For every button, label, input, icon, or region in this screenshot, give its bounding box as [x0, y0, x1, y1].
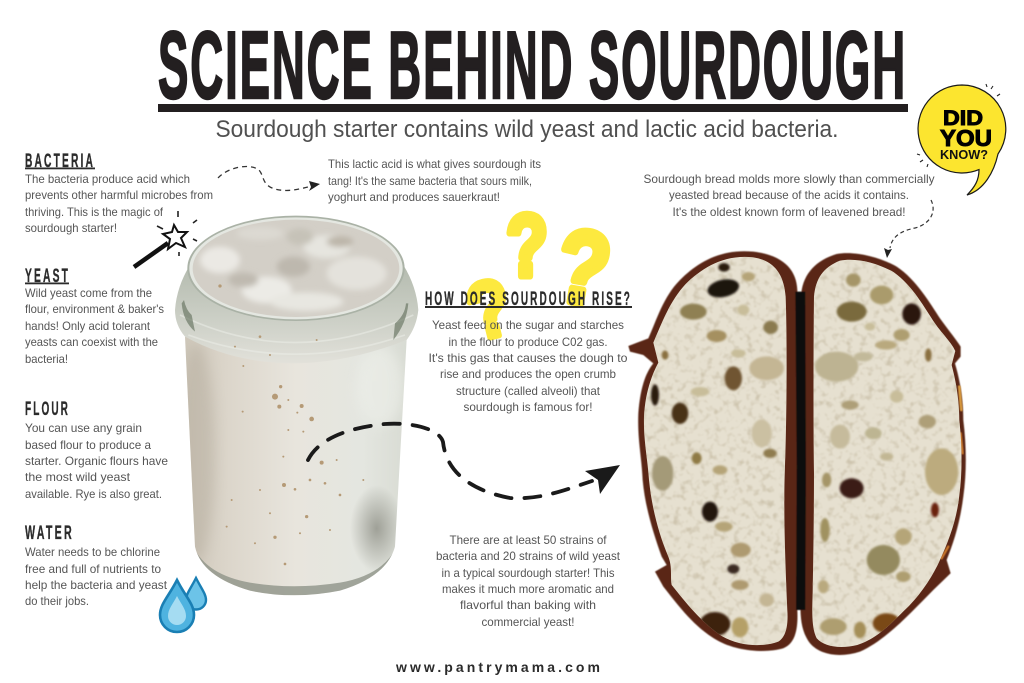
glass highlights	[182, 300, 408, 340]
text: strains: in a typical sourdough starter! This	[442, 566, 614, 580]
text: strains: commercial yeast!	[482, 615, 574, 629]
surface bubbles	[200, 227, 387, 311]
panel: water: WATER	[25, 523, 74, 544]
jar body	[185, 337, 407, 595]
sourdough bread cross-section	[628, 251, 967, 655]
starter surface	[193, 220, 399, 317]
panel: yeast: hands! Only acid tolerant	[25, 319, 151, 333]
panel: yeast: flour, environment & baker's	[25, 302, 164, 316]
text: lactic acid	[328, 157, 541, 204]
panel: bacteria	[25, 151, 213, 235]
panel: flour: the most wild yeast	[25, 470, 131, 484]
text: how sourdough rises: rise and produces the open crumb	[440, 367, 616, 381]
subtitle: Sourdough starter contains wild yeast and lactic acid bacteria.	[216, 116, 838, 143]
footer url: www.pantrymama.com	[395, 659, 600, 675]
panel: water: Water needs to be chlorine	[25, 545, 160, 559]
text: did you know fact	[644, 172, 934, 219]
text: strains: flavorful than baking with	[460, 598, 596, 612]
panel: yeast: Wild yeast come from the	[25, 286, 152, 300]
text: how sourdough rises: It's this gas that causes the dough to	[428, 351, 628, 365]
panel: flour: available. Rye is also great.	[25, 487, 162, 501]
panel: bacteria: sourdough starter!	[25, 221, 117, 235]
speckles	[218, 284, 364, 565]
bubble	[918, 85, 1006, 195]
air holes	[651, 263, 958, 638]
jar shading	[178, 343, 403, 597]
panel: flour: based flour to produce a	[25, 438, 151, 452]
panel: water	[25, 523, 168, 608]
icon: magic wand	[134, 211, 197, 267]
text: strains: makes it much more aromatic and	[442, 582, 614, 596]
panel: water: do their jobs.	[25, 594, 89, 608]
text: strains: There are at least 50 strains of	[450, 533, 607, 547]
panel: bacteria: prevents other harmful microbes from	[25, 188, 213, 202]
yellow question marks	[458, 196, 619, 358]
arrow: jar to bread	[308, 424, 620, 498]
text: how sourdough rises: structure (called alveoli) that	[456, 384, 601, 398]
text: strains: bacteria and 20 strains of wild yeast	[436, 549, 621, 563]
arrow: bacteria to lactic acid text	[218, 167, 320, 191]
text: did you know fact: It's the oldest known form of leavened bread!	[672, 205, 906, 219]
text: how sourdough rises: Yeast feed on the sugar and starches	[432, 318, 624, 332]
text: how sourdough rises	[428, 318, 628, 414]
text: lactic acid: yoghurt and produces sauerkraut!	[328, 190, 500, 204]
neck rib lines	[180, 315, 413, 354]
text: how sourdough rises: in the flour to produce C02 gas.	[448, 335, 608, 349]
did you know speech bubble	[917, 84, 1006, 195]
icon: water drops	[160, 578, 206, 632]
heading: how does sourdough rise: HOW DOES SOURDOUGH RISE?	[425, 289, 632, 310]
yellow question marks: ?	[506, 196, 548, 295]
crumb	[640, 253, 967, 650]
text: did you know fact: Sourdough bread molds more slowly than commercially	[644, 172, 934, 186]
text: lactic acid: tang! It's the same bacteria that sours milk,	[328, 174, 532, 188]
jar rim	[187, 216, 405, 321]
text: how sourdough rises: sourdough is famous for!	[464, 400, 592, 414]
panel: flour: starter. Organic flours have	[25, 454, 168, 468]
yellow question marks: ?	[458, 261, 520, 358]
panel: yeast	[25, 266, 164, 366]
yellow question marks: ?	[547, 207, 619, 330]
text: lactic acid: This lactic acid is what gives sourdough its	[328, 157, 541, 171]
panel: water: free and full of nutrients to	[25, 562, 161, 576]
panel: bacteria: The bacteria produce acid which	[25, 172, 190, 186]
did you know speech bubble: KNOW?	[940, 148, 988, 162]
panel: flour: FLOUR	[25, 399, 70, 420]
arrow: fact to bread	[884, 200, 933, 258]
text: did you know fact: yeasted bread because of the acids it contains.	[669, 188, 909, 202]
panel: yeast: yeasts can coexist with the	[25, 335, 158, 349]
text: strains	[436, 533, 621, 629]
jar neck and rim	[175, 265, 418, 363]
panel: flour	[25, 399, 168, 501]
did you know speech bubble: DID	[943, 107, 983, 130]
jar of sourdough starter	[175, 216, 418, 597]
did you know speech bubble: YOU	[940, 125, 992, 151]
panel: bacteria: BACTERIA	[25, 151, 95, 172]
panel: bacteria: thriving. This is the magic of	[25, 205, 164, 219]
crust	[628, 251, 966, 655]
crust highlights	[942, 387, 963, 558]
panel: yeast: bacteria!	[25, 352, 68, 366]
panel: yeast: YEAST	[25, 266, 70, 287]
panel: flour: You can use any grain	[25, 421, 142, 435]
panel: water: help the bacteria and yeast	[25, 578, 168, 592]
